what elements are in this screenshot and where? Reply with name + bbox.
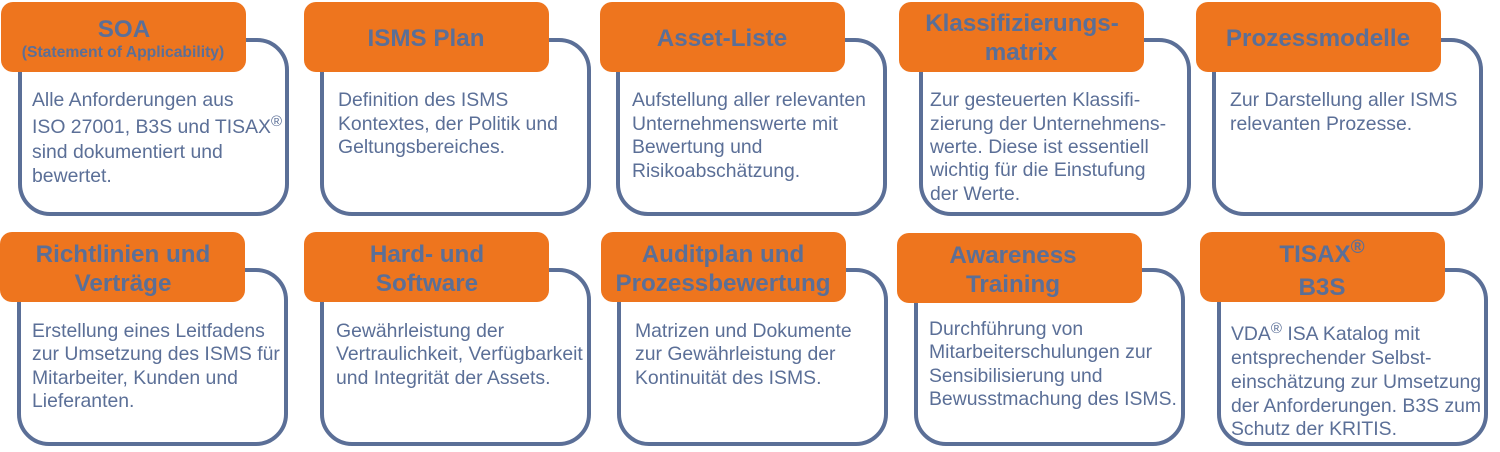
heading: SOA (22, 16, 224, 61)
text: Asset-Liste description: Aufstellung aller relevanten (632, 89, 866, 111)
heading: Richtlinien und Verträge: Verträge (75, 270, 171, 297)
heading: Hard- und Software: Software (376, 270, 478, 297)
text: TISAX description: VDA (1231, 323, 1271, 345)
text: Klassifizierungsmatrix description: zierung der Unternehmens- (930, 113, 1166, 135)
text: Awareness description: Sensibilisierung und (929, 365, 1103, 387)
heading: Auditplan und Prozessbewertung (615, 241, 831, 297)
heading: TISAX B3S: TISAX (1279, 241, 1351, 268)
heading: Asset-Liste: Asset-Liste (657, 25, 787, 52)
text: TISAX description: einschätzung zur Umsetzung (1231, 371, 1481, 393)
text: Auditplan description (635, 320, 852, 389)
text: Auditplan description: Kontinuität des ISMS. (635, 367, 821, 389)
text: Richtlinien description: Lieferanten. (32, 390, 134, 412)
panel: SOA (1, 2, 287, 214)
text: Klassifizierungsmatrix description: Zur gesteuerten Klassifi- (930, 89, 1140, 111)
text: TISAX description: der Anforderungen. B3S zum (1231, 395, 1481, 417)
text: Hard- und Software description: Gewährleistung der (336, 320, 505, 342)
text: SOA description (32, 89, 282, 187)
text: Prozessmodelle description: relevanten Prozesse. (1230, 113, 1412, 135)
text: ISMS Plan description: Kontextes, der Politik und (338, 113, 558, 135)
panel: Hard- und Software (304, 232, 589, 444)
text: SOA description: Alle Anforderungen aus (32, 89, 234, 111)
text: ISMS Plan description: Geltungsbereiches. (338, 136, 505, 158)
text: TISAX description (1231, 320, 1481, 440)
panel: ISMS Plan (304, 2, 589, 214)
panel: TISAX B3S (1200, 232, 1486, 444)
text: ISMS Plan description (338, 89, 558, 158)
text: Richtlinien description (32, 320, 280, 412)
text: TISAX description: ISA Katalog mit (1282, 323, 1421, 345)
text: Asset-Liste description: Risikoabschätzung. (632, 160, 800, 182)
panel: Prozessmodelle (1196, 2, 1481, 214)
heading: ISMS Plan: ISMS Plan (368, 25, 484, 52)
heading: SOA: (Statement of Applicability) (22, 44, 224, 61)
heading: TISAX B3S: B3S (1298, 274, 1346, 301)
text: Richtlinien description: Erstellung eines Leitfadens (32, 320, 265, 342)
text: Hard- und Software description (336, 320, 583, 389)
text: Auditplan description: Matrizen und Dokumente (635, 320, 852, 342)
text: Hard- und Software description: Vertraulichkeit, Verfügbarkeit (336, 343, 583, 365)
panel: Awareness Training (897, 233, 1183, 444)
text: Prozessmodelle description: Zur Darstellung aller ISMS (1230, 89, 1457, 111)
text: Klassifizierungsmatrix description: der Werte. (930, 183, 1020, 205)
text: Asset-Liste description (632, 89, 866, 182)
heading: Hard- und Software (370, 241, 484, 297)
heading: SOA: SOA (98, 16, 150, 43)
text: TISAX description: ® (1271, 320, 1282, 337)
heading: Awareness Training: Training (966, 271, 1060, 298)
text: Awareness description: Bewusstmachung des ISMS. (929, 388, 1177, 410)
text: Klassifizierungsmatrix description: werte. Diese ist essentiell (929, 136, 1149, 158)
panel: Auditplan und Prozessbewertung (601, 232, 886, 444)
heading: Awareness Training: Awareness (949, 242, 1077, 269)
text: ISMS Plan description: Definition des ISMS (338, 89, 508, 111)
text: Awareness description (929, 318, 1177, 410)
panel: Richtlinien und Verträge (0, 232, 286, 444)
text: Auditplan description: zur Gewährleistung der (635, 343, 836, 365)
text: Awareness description: Mitarbeiterschulungen zur (929, 341, 1153, 363)
text: Richtlinien description: Mitarbeiter, Kunden und (32, 367, 238, 389)
text: TISAX description: entsprechender Selbst- (1231, 347, 1432, 369)
heading: Awareness Training (949, 242, 1077, 298)
heading: TISAX B3S (1279, 237, 1365, 301)
text: Asset-Liste description: Bewertung und (632, 136, 762, 158)
heading: Richtlinien und Verträge (36, 241, 210, 297)
panel: Asset-Liste (600, 2, 885, 214)
text: Prozessmodelle description (1230, 89, 1457, 135)
heading: Klassifizierungsmatrix (925, 10, 1119, 66)
heading: Hard- und Software: Hard- und (370, 241, 484, 268)
text: SOA description: ISO 27001, B3S und TISAX (32, 116, 271, 138)
heading: Auditplan und Prozessbewertung: Prozessbewertung (615, 270, 831, 297)
text: Awareness description: Durchführung von (929, 318, 1083, 340)
heading: Klassifizierungsmatrix: Klassifizierungs- (925, 10, 1119, 37)
text: Richtlinien description: zur Umsetzung des ISMS für (32, 343, 280, 365)
panel: Klassifizierungsmatrix (899, 2, 1189, 214)
text: Klassifizierungsmatrix description: wichtig für die Einstufung (929, 159, 1146, 181)
text: Klassifizierungsmatrix description (929, 89, 1166, 205)
text: SOA description: bewertet. (32, 165, 112, 187)
text: TISAX description: Schutz der KRITIS. (1231, 418, 1397, 440)
heading: TISAX B3S: ® (1351, 237, 1365, 258)
text: SOA description: ® (271, 113, 282, 130)
heading: Auditplan und Prozessbewertung: Auditplan und (642, 241, 804, 268)
heading: Prozessmodelle: Prozessmodelle (1226, 25, 1410, 52)
heading: Klassifizierungsmatrix: matrix (985, 39, 1058, 66)
heading: Richtlinien und Verträge: Richtlinien und (36, 241, 210, 268)
text: Asset-Liste description: Unternehmenswerte mit (632, 113, 838, 135)
text: SOA description: sind dokumentiert und (32, 141, 223, 163)
text: Hard- und Software description: und Integrität der Assets. (336, 367, 550, 389)
